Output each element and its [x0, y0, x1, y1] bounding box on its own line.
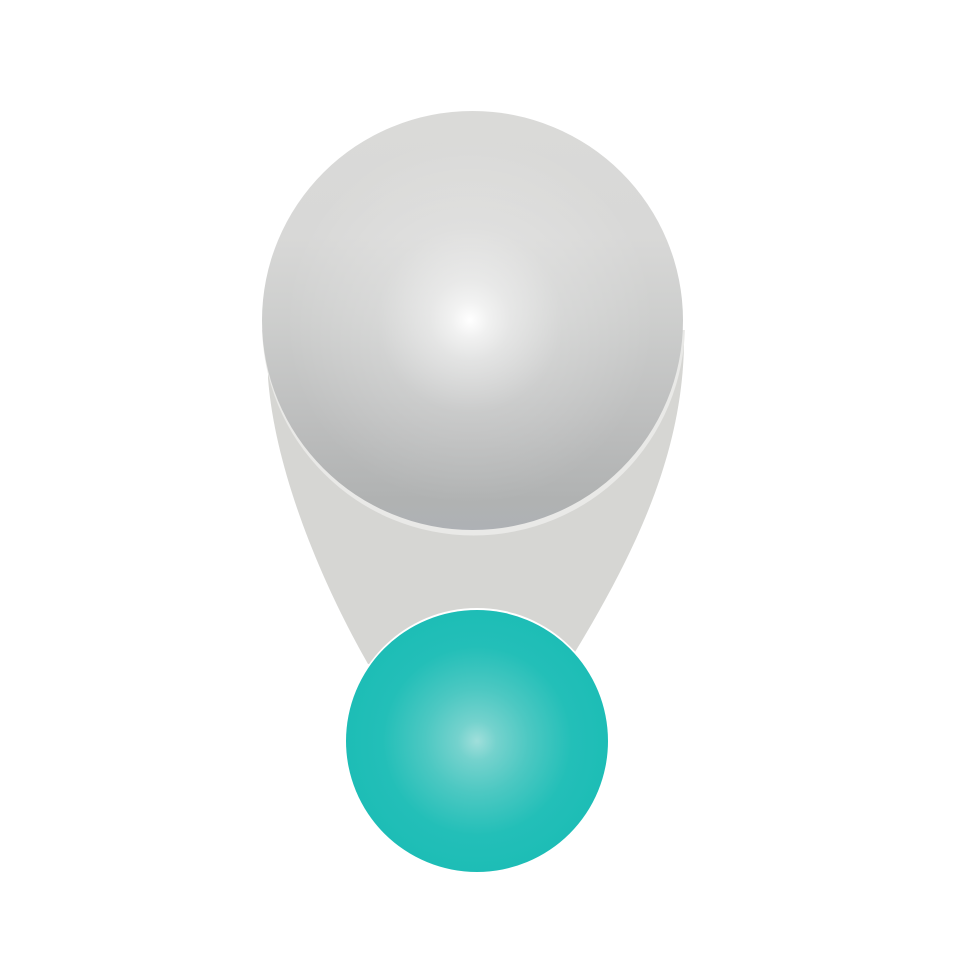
large grey sphere: [262, 111, 685, 536]
pin body: [268, 340, 684, 664]
sphere base shading: [262, 111, 683, 530]
sphere highlight: [262, 111, 683, 530]
teal sphere rim: [345, 608, 609, 872]
sphere rim: [262, 330, 685, 536]
teal sphere: [345, 608, 609, 872]
infographic: pin with two spheres: [262, 111, 685, 872]
teal sphere fill: [346, 610, 608, 872]
